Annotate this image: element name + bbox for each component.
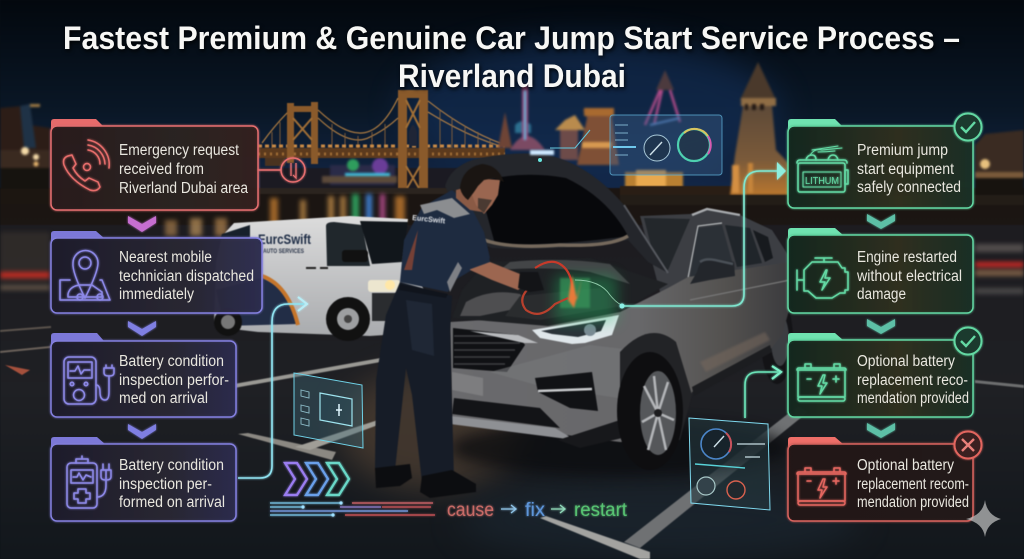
icon: lithium battery: LITHUM <box>805 175 839 187</box>
head <box>456 185 482 212</box>
panel: emergency request <box>51 119 258 210</box>
van logo: AUTO SERVICES <box>263 249 304 255</box>
text block: formed on arrival <box>119 494 225 511</box>
arrow: step two to three <box>128 321 156 336</box>
open hood <box>445 153 668 273</box>
icon: cross badge <box>954 432 982 458</box>
text block: Optional battery <box>857 457 954 474</box>
arrow: step three to four <box>128 424 156 439</box>
text block <box>856 249 962 303</box>
engine bay <box>452 258 668 326</box>
caption: cause fix restart: cause <box>447 500 494 521</box>
greenhouse <box>640 209 792 292</box>
text block: immediately <box>119 286 194 303</box>
text block: Engine restarted <box>857 249 957 266</box>
text block: Battery condition <box>119 353 224 370</box>
icon: battery tester <box>64 357 114 404</box>
van logo: EurcSwift <box>258 232 311 247</box>
text block: without electrical <box>856 268 962 285</box>
body side <box>450 262 792 442</box>
panel: engine restarted <box>788 228 973 313</box>
text block: mendation provided <box>857 494 969 511</box>
jump cables and glowing battery <box>522 262 625 323</box>
text block <box>857 457 969 511</box>
text block: replacement recom- <box>857 476 969 493</box>
SUV car <box>445 153 793 476</box>
arrow: step one to two <box>128 216 156 232</box>
caption: cause fix restart: fix <box>525 500 546 521</box>
text block <box>857 353 969 407</box>
rear wheel <box>761 296 793 384</box>
icon: check badge <box>954 328 982 354</box>
front wheel <box>620 333 692 444</box>
arrow: right step three to four <box>867 423 895 438</box>
icon: medical battery tester <box>67 456 111 508</box>
title: Fastest Premium & Genuine Car Jump Start Service Process – <box>63 20 960 56</box>
headlight <box>532 315 619 344</box>
text block: technician dispatched <box>119 268 254 285</box>
icon: engine warning <box>797 258 848 298</box>
triple chevron arrows <box>285 463 349 495</box>
trousers <box>375 282 454 482</box>
text block <box>119 142 248 197</box>
grille <box>453 328 525 372</box>
hologram: top dashboard <box>530 115 722 175</box>
torso <box>400 190 490 292</box>
panel: premium equipment connected <box>788 114 982 208</box>
text block <box>119 353 229 407</box>
road streaks and parking markings <box>0 232 1024 559</box>
icon: lithium battery <box>797 146 848 192</box>
text block: replacement reco- <box>857 372 968 389</box>
text block: Nearest mobile <box>119 249 212 266</box>
text block <box>119 457 225 511</box>
arrow: right step two to three <box>867 319 895 334</box>
technician <box>375 164 544 498</box>
icon: phone with signal <box>64 140 109 191</box>
text block: Optional battery <box>857 353 955 370</box>
panel: battery replacement recommendation red <box>788 432 982 521</box>
circuit speed lines <box>270 501 435 517</box>
skyline: towers and amusement park <box>0 62 1024 205</box>
panel: battery inspection <box>51 333 236 417</box>
text block: Premium jump <box>857 142 948 159</box>
logo on uniform: EurcSwift <box>412 213 446 225</box>
skyline: left buildings <box>0 104 50 200</box>
text block <box>119 249 254 303</box>
text block: mendation provided <box>857 390 969 407</box>
delivery van <box>214 216 424 341</box>
hologram: gauge panel <box>689 418 770 510</box>
icon: red car battery <box>797 468 846 505</box>
text block: med on arrival <box>119 390 208 407</box>
title <box>63 20 960 94</box>
boots <box>375 464 412 488</box>
text block: received from <box>119 161 204 178</box>
icon: map pin and car <box>60 250 110 300</box>
hologram: battery screen <box>294 373 363 448</box>
skyline: suspension bridge <box>258 90 505 194</box>
text block: Emergency request <box>119 142 240 159</box>
river reflections <box>165 194 405 236</box>
van logo <box>258 232 311 255</box>
arm <box>470 258 526 290</box>
flow connector: from inspection to service <box>238 297 307 478</box>
text block <box>857 142 961 196</box>
icon: check badge <box>954 114 982 140</box>
text block: safely connected <box>857 179 961 196</box>
bumper <box>490 345 632 398</box>
caption: cause fix restart <box>447 500 628 521</box>
panel: battery replacement recommendation <box>788 328 982 417</box>
title: Riverland Dubai <box>398 58 626 94</box>
icon: car battery <box>797 364 846 401</box>
text block: damage <box>857 286 906 303</box>
text block: Battery condition <box>119 457 224 474</box>
icon: sparkle watermark <box>966 500 1001 537</box>
panel: technician dispatched <box>51 231 262 313</box>
text block: inspection perfor- <box>119 372 229 389</box>
text block: start equipment <box>857 161 955 178</box>
text block: Riverland Dubai area <box>119 180 248 197</box>
flow connector: to battery replacement <box>745 366 781 418</box>
connector node: red gauge <box>258 158 305 182</box>
caption: cause fix restart: restart <box>574 500 628 521</box>
door mirror <box>690 258 735 284</box>
arrow: right step one to two <box>867 214 895 229</box>
panel: battery inspection two <box>51 437 236 521</box>
flow connector: to premium equipment <box>620 162 786 308</box>
text block: inspection per- <box>119 476 212 493</box>
